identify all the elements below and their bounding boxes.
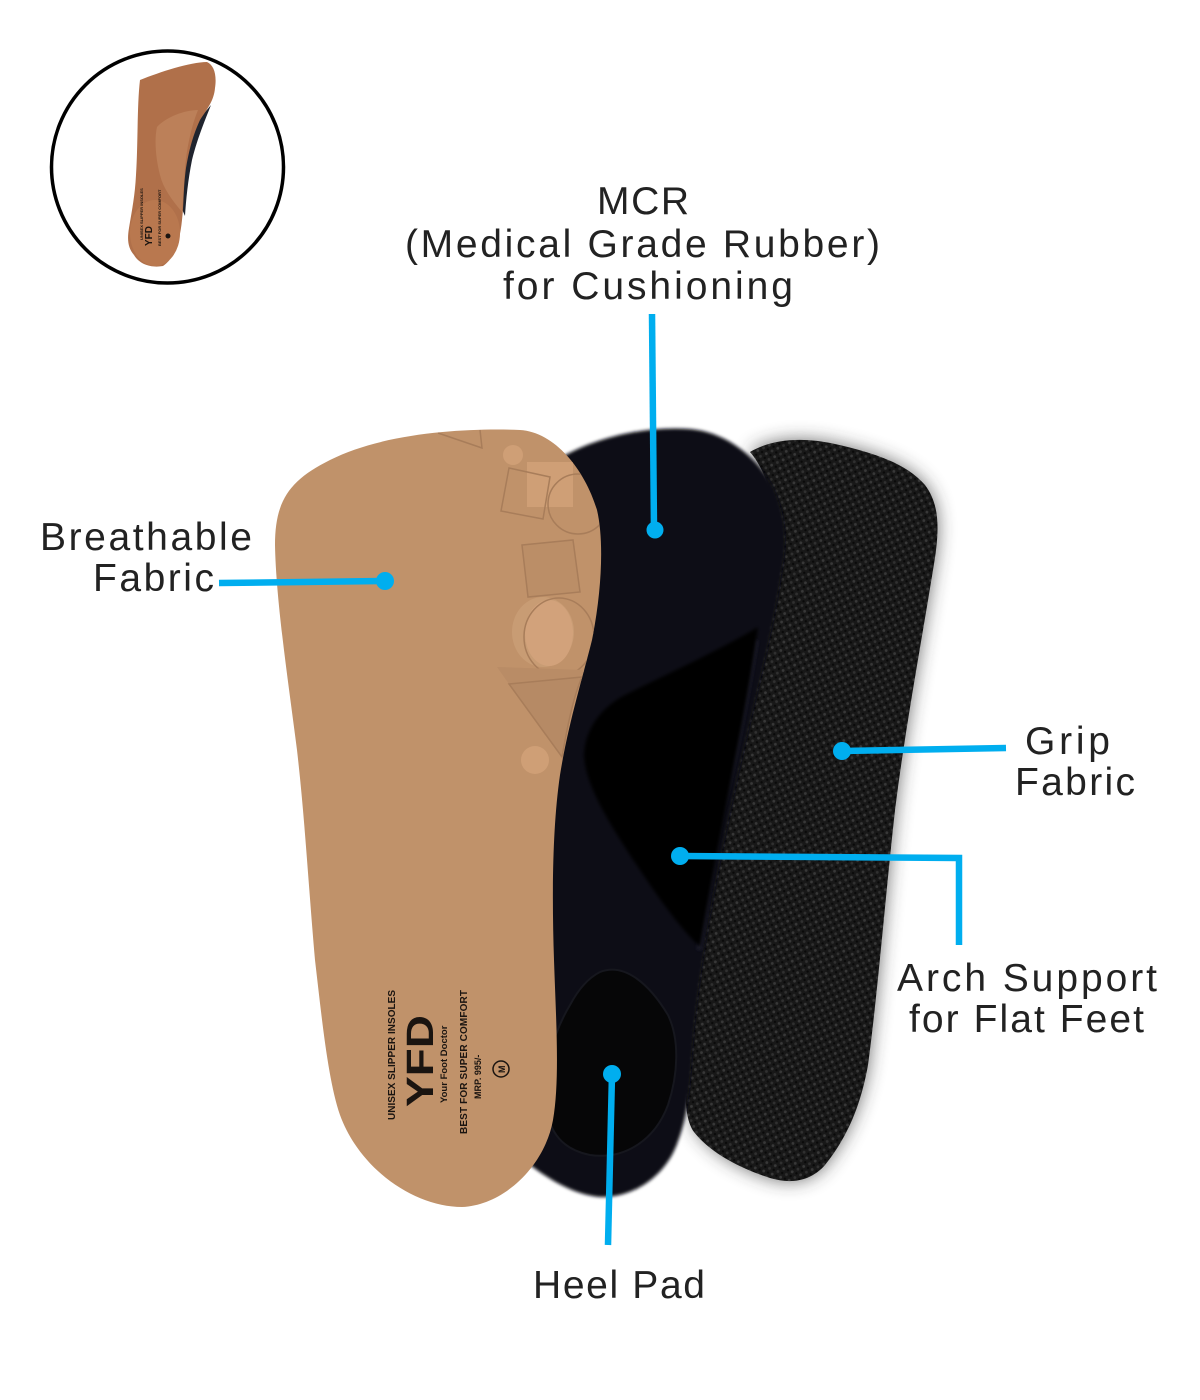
callout: Grip Fabric line — [833, 742, 1006, 760]
label: MCR: MCR — [597, 180, 689, 223]
callout: Arch Support line — [671, 847, 959, 945]
layer: arch support — [584, 627, 758, 947]
thumbnail brand print: YFD — [144, 226, 155, 246]
label: Breathable Fabric: Fabric — [93, 557, 214, 600]
layer: breathable fabric top insole — [275, 430, 608, 1207]
brand print on insole: Your Foot Doctor — [439, 1025, 450, 1103]
icon: dark underside edge of thumbnail insole — [178, 105, 211, 216]
decorative shapes — [438, 430, 608, 774]
brand print on insole: MRP. 995/- — [473, 1055, 483, 1099]
label: Grip Fabric: Grip — [1025, 720, 1110, 763]
label: Heel Pad: Heel Pad — [533, 1264, 705, 1307]
label: MCR: (Medical Grade Rubber) — [405, 223, 880, 266]
brand print on insole: BEST FOR SUPER COMFORT — [459, 990, 470, 1134]
thumbnail: insole photo in circle — [52, 51, 284, 283]
label: Grip Fabric: Fabric — [1015, 761, 1135, 804]
label: MCR — [405, 180, 880, 308]
callout: Breathable Fabric line — [219, 572, 394, 590]
label: Breathable Fabric — [40, 516, 252, 600]
layer: MCR medical grade rubber — [500, 428, 785, 1197]
icon: thumbnail insole — [128, 62, 216, 267]
layer: grip fabric — [686, 440, 938, 1181]
icon: thumbnail arch highlight — [156, 110, 198, 212]
label: Grip Fabric — [1015, 720, 1135, 804]
brand print on insole: YFD — [400, 1015, 442, 1107]
bevel strip beside the arch — [699, 640, 756, 950]
label: Arch Support for Flat Feet: Arch Support — [897, 957, 1157, 1000]
brand print on insole: M — [497, 1066, 507, 1073]
layer: heel pad — [545, 970, 676, 1156]
callout: Heel Pad line — [603, 1065, 621, 1245]
label: Arch Support for Flat Feet: for Flat Feet — [909, 998, 1144, 1041]
label: MCR: for Cushioning — [503, 265, 793, 308]
label: Arch Support for Flat Feet — [897, 957, 1157, 1041]
brand print on insole: UNISEX SLIPPER INSOLES — [387, 990, 398, 1120]
thumbnail brand print — [139, 188, 170, 246]
label: Breathable Fabric: Breathable — [40, 516, 252, 559]
thumbnail brand print: BEST FOR SUPER COMFORT — [157, 189, 162, 246]
brand print on insole — [387, 990, 509, 1134]
callout: MCR line — [646, 314, 664, 538]
icon: thumbnail heel cup — [130, 200, 180, 266]
thumbnail brand print: UNISEX SLIPPER INSOLES — [139, 188, 144, 240]
